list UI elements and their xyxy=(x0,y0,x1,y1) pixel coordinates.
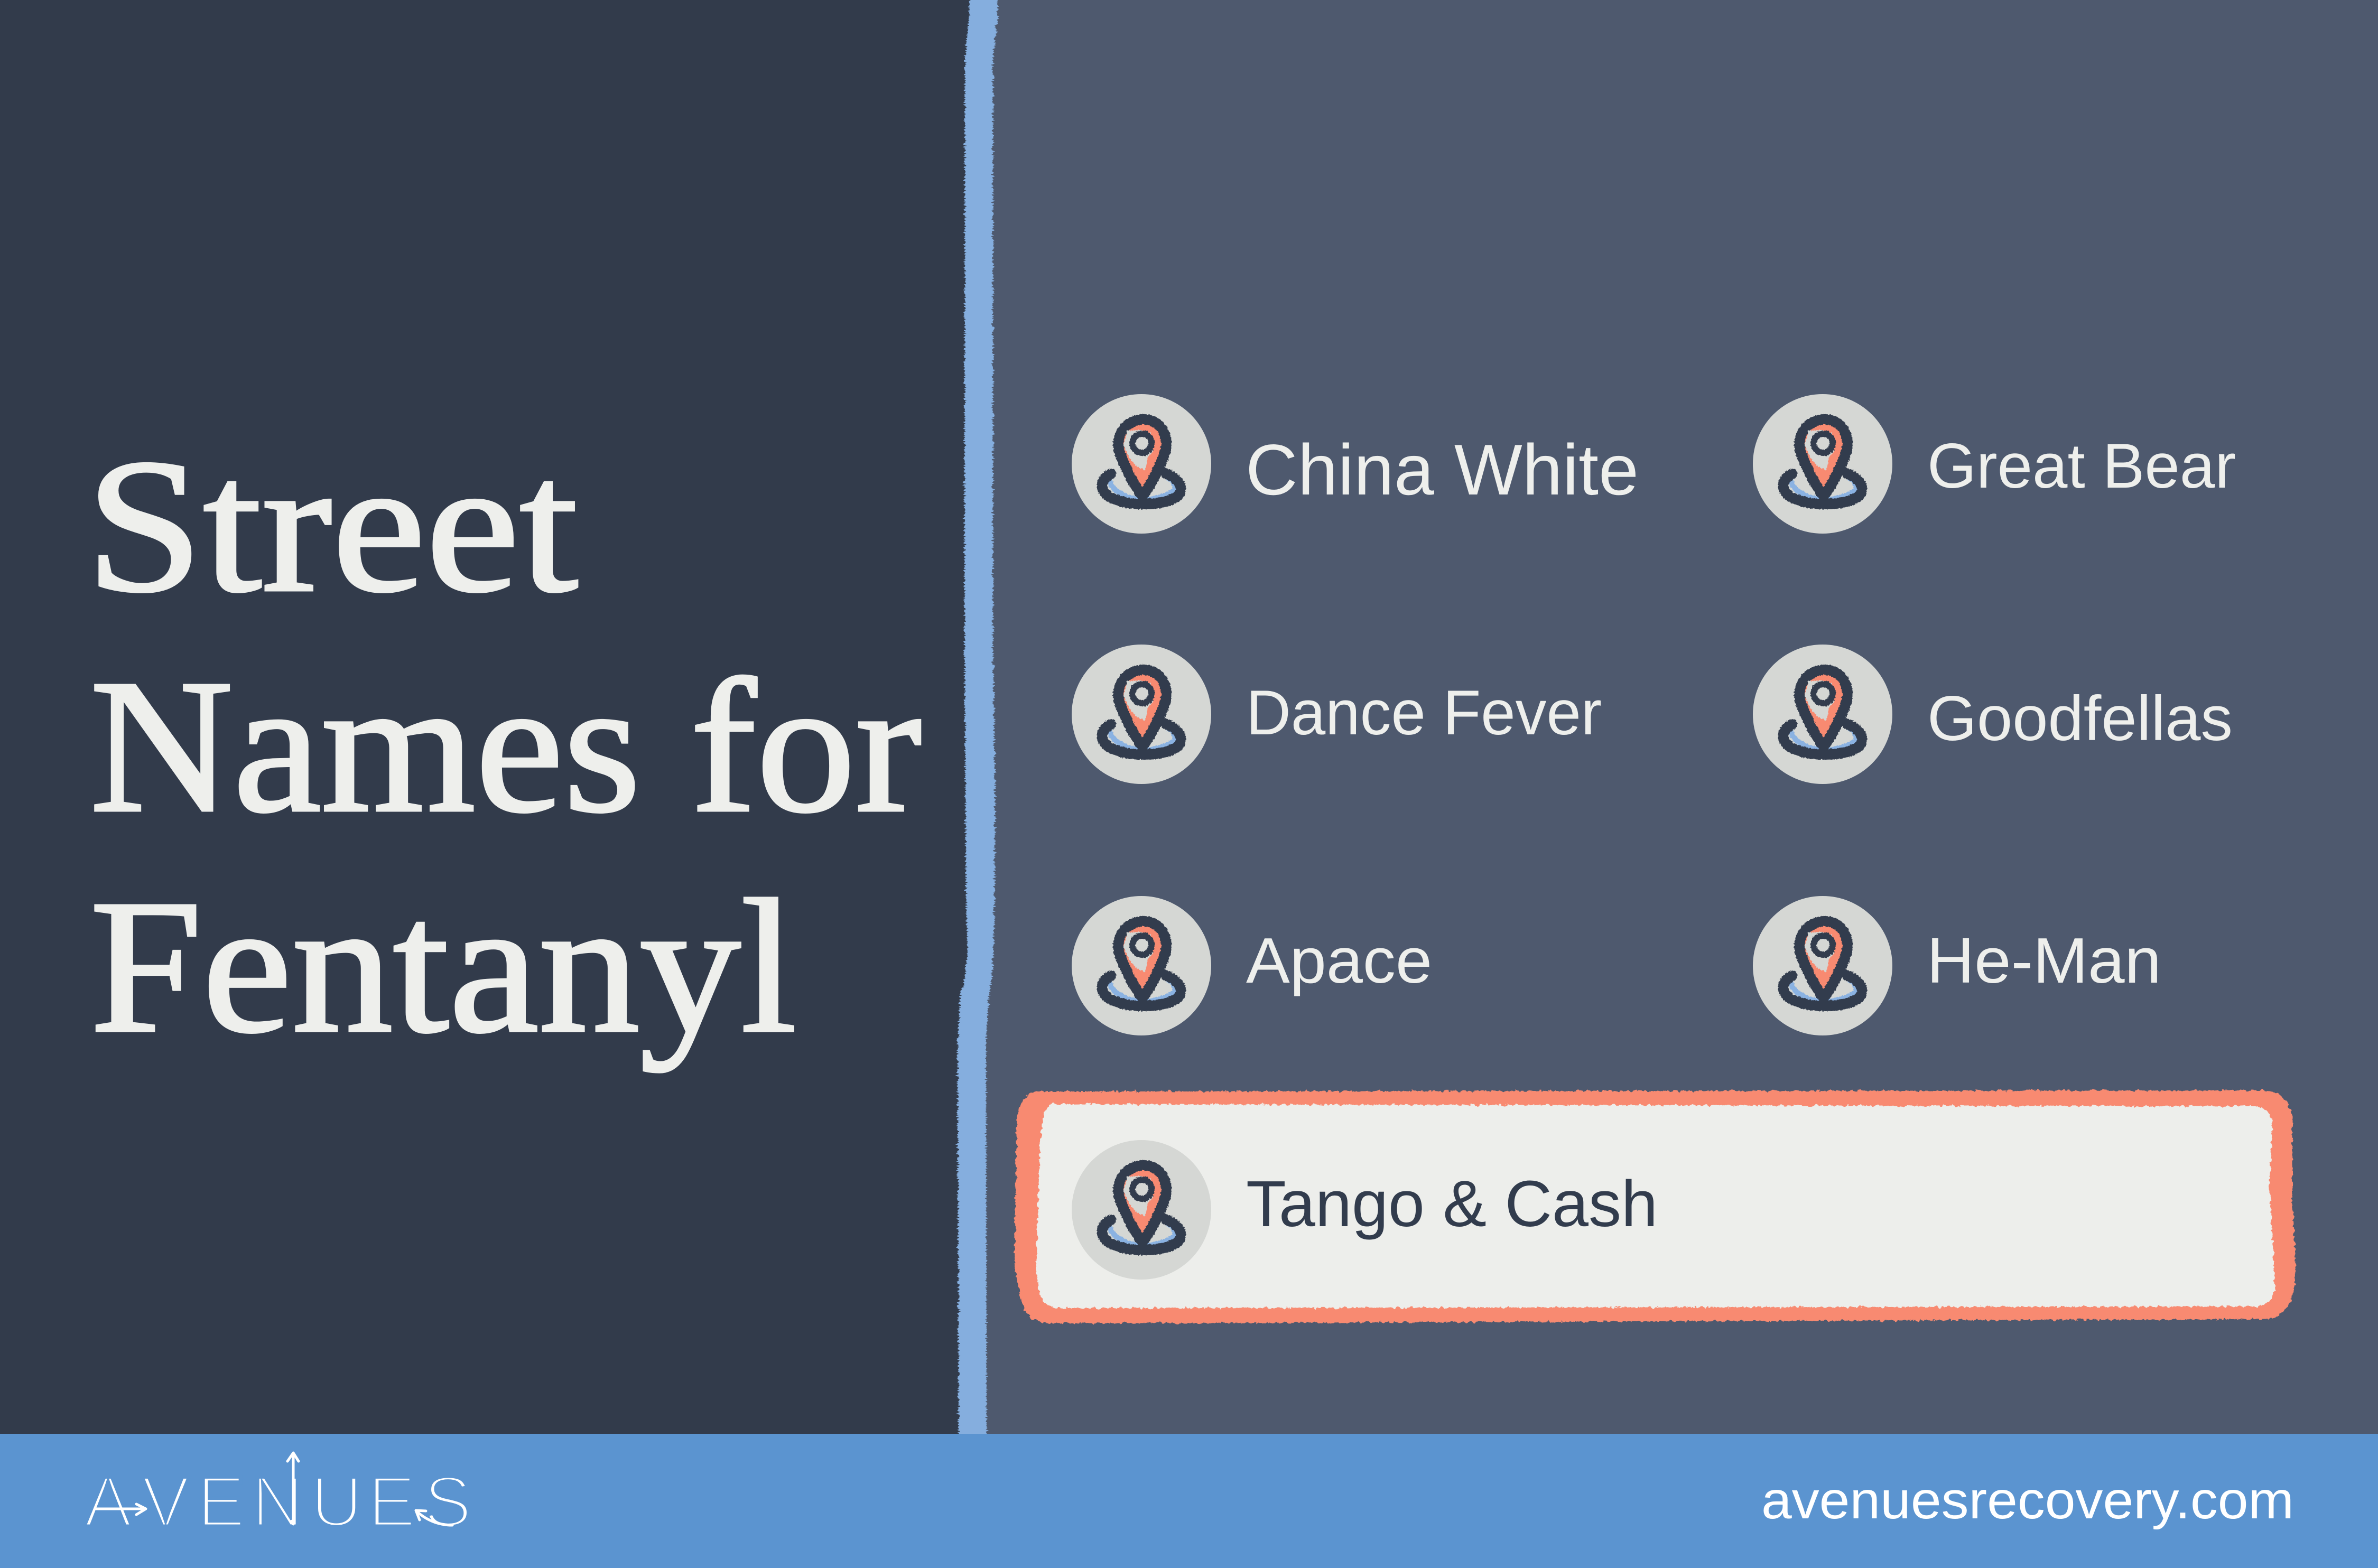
icon: location pin xyxy=(1072,896,1211,1035)
icon: location pin xyxy=(1753,896,1892,1035)
list item: China White xyxy=(1072,394,1639,534)
label: He-Man: He-Man xyxy=(1927,925,2161,996)
icon: location pin xyxy=(1753,645,1892,784)
logo: Avenues: AVENUES xyxy=(84,1461,472,1542)
list item: Great Bear xyxy=(1753,394,2236,534)
icon: location pin xyxy=(1072,645,1211,784)
title xyxy=(86,420,922,1072)
coral rough border xyxy=(1015,1090,2296,1323)
panel: left title background xyxy=(0,0,978,1568)
arrow: N upward xyxy=(287,1453,299,1524)
label: Dance Fever: Dance Fever xyxy=(1246,677,1602,748)
icon: location pin xyxy=(1753,394,1892,534)
label: Great Bear: Great Bear xyxy=(1927,431,2236,501)
label: Apace: Apace xyxy=(1246,925,1432,996)
title: Names for xyxy=(90,640,922,852)
footer website URL: avenuesrecovery.com xyxy=(1761,1471,2294,1530)
footer bar xyxy=(0,1434,2378,1568)
arrow: A crossbar xyxy=(96,1504,146,1515)
arrow: S tail xyxy=(416,1510,452,1525)
panel: right background xyxy=(951,0,2378,1568)
icon: location pin xyxy=(1072,394,1211,534)
label: Tango & Cash: Tango & Cash xyxy=(1246,1168,1658,1240)
list item: Apace xyxy=(1072,896,1432,1035)
blue torn divider strip xyxy=(958,0,998,1442)
title: Street xyxy=(86,420,579,632)
cream box fill xyxy=(1036,1104,2275,1308)
list item: Goodfellas xyxy=(1753,645,2233,784)
list item: Dance Fever xyxy=(1072,645,1602,784)
icon: location pin xyxy=(1072,1140,1211,1280)
label: Goodfellas: Goodfellas xyxy=(1927,683,2233,754)
highlighted item: Tango & Cash xyxy=(1015,1090,2296,1323)
label: China White: China White xyxy=(1246,430,1639,510)
title: Fentanyl xyxy=(90,861,797,1072)
list item: He-Man xyxy=(1753,896,2161,1035)
